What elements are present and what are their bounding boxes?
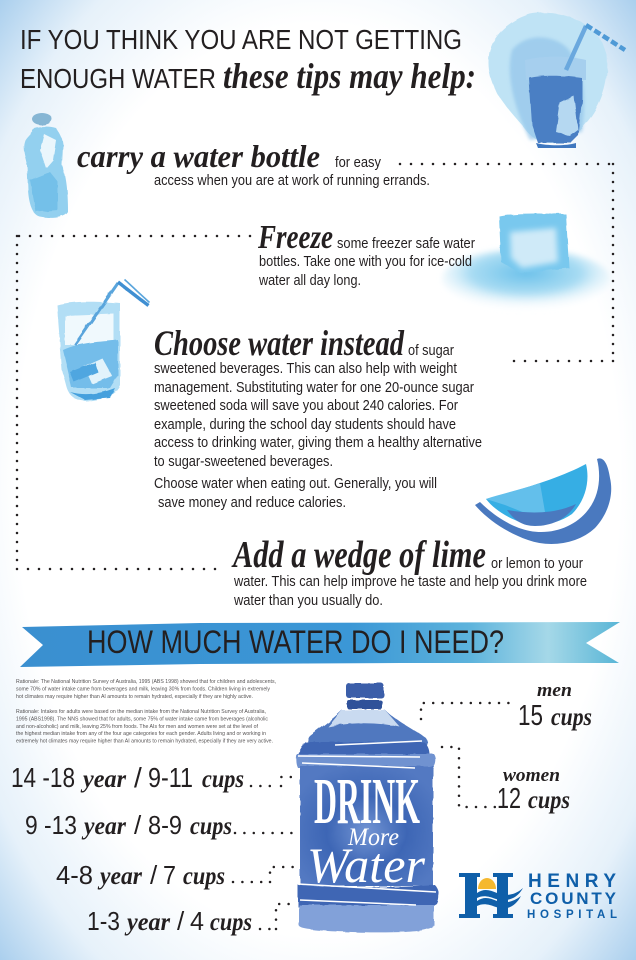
tip text: of sugar [408,342,454,359]
age row: 1-3: 4 [190,906,204,936]
age row: 9-13: 9 -13 [25,810,77,840]
tip text: access when you are at work of running errands. [154,173,430,189]
age row: 1-3: cups [210,909,252,936]
age row: 4-8: 4-8 [56,860,93,890]
age row: 9-13 [25,810,298,840]
tip text: example, during the school day students should have [154,416,456,433]
rationale text: and non-alcoholic) and milk, leaving 25% from foods. The AIs for men and women were set at the level of [16,724,258,730]
jug shape [296,683,439,932]
title: these tips may help: [223,56,476,96]
tip: carry a water bottle [24,113,430,218]
age row: 4-8: 7 [163,860,176,890]
tip text [258,235,475,289]
age row: 9-13: 8-9 [148,810,182,840]
women callout: 12 [497,783,521,815]
banner ribbon [20,622,620,667]
age row: 14-18: 14 -18 [11,762,75,793]
icon: glass with straw on watercolor blob [488,13,625,148]
age row: 4-8: year [97,863,142,890]
title: ENOUGH WATER [20,63,216,94]
logo name: COUNTY [530,889,617,908]
tip text: water than you usually do. [233,592,383,609]
tip text [154,155,430,189]
women callout [442,747,570,815]
men callout: cups [551,704,592,731]
logo name [527,871,617,921]
tip text: or lemon to your [491,555,583,572]
banner text: HOW MUCH WATER DO I NEED? [87,624,504,660]
age row: 1-3: / [177,906,185,936]
banner heading [20,622,620,667]
rationale text: 1995 (ABS1998). The NNS showed that for adults, some 75% of water intake came from beverages (alcoholic [16,716,268,722]
age row: 14-18: cups [202,766,244,793]
rationale text: the highest median intake from any of the four age categories for each gender. Adults living and or working in [16,731,266,737]
tip text: to sugar-sweetened beverages. [154,453,333,470]
men callout: men [537,680,572,701]
age row: 14-18: year [80,766,126,793]
tip heading: carry a water bottle [77,138,320,174]
tip text: water. This can help improve he taste and help you drink more [233,573,587,590]
title: IF YOU THINK YOU ARE NOT GETTING [20,24,462,55]
tip text: sweetened beverages. This can also help with weight [154,360,458,377]
title [20,24,476,96]
tip text [154,342,482,511]
jug highlight stripes [298,741,436,905]
water jug illustration [296,683,439,932]
tip text: for easy [335,155,382,171]
icon: lime wedge [475,458,611,544]
logo: Henry County Hospital [459,871,617,921]
tip heading: Add a wedge of lime [231,534,486,576]
age row: 9-13: / [134,810,142,840]
tip text: Choose water when eating out. Generally, you will [154,475,437,492]
rationale text: Rationale: The National Nutrition Survey of Australia, 1995 (ABS 1998) showed that for children and adolescents, [16,679,276,685]
tip text: save money and reduce calories. [158,494,346,511]
age row: 1-3 [87,904,295,936]
icon: glass with ice [57,279,150,401]
tip text: bottles. Take one with you for ice-cold [259,253,472,270]
tip: freeze [257,214,610,309]
age row: 14-18: 9-11 [148,762,193,793]
rationale text: extremely hot climates may require higher than AI amounts to remain hydrated, especially if they are very active. [16,738,273,744]
age row: 4-8: / [150,860,158,890]
women callout: women [503,765,560,786]
age row: 1-3: year [124,909,170,936]
men callout [421,680,592,732]
tip text: some freezer safe water [337,235,475,252]
water jug illustration: DRINK [314,765,420,838]
age row: 4-8 [56,860,297,890]
rationale text: Rationale: Intakes for adults were based on the median intake from the National Nutrition Survey of Australia, [16,709,266,715]
rationale text: hot climates may require higher than AI amounts to remain hydrated, especially if they are highly active. [16,694,253,700]
age row: 9-13: year [81,813,126,840]
rationale text [16,679,276,744]
age row: 4-8: cups [183,863,225,890]
age row: 14-18 [11,762,297,793]
tip: add a wedge of lime [231,458,611,609]
tip text: access to drinking water, giving them a healthy alternative [154,434,482,451]
tip heading: Choose water instead [154,323,405,363]
icon: ice cube and puddle [442,214,610,309]
age row: 14-18: / [134,762,142,793]
logo name: HENRY [528,871,616,892]
tip text [233,555,587,609]
jug text: more: More [347,824,399,851]
rationale text: some 70% of water intake came from beverages and milk, leaving 30% from foods. Children living in extremely [16,686,270,692]
tip: choose water instead [57,279,482,511]
logo mark [459,873,523,918]
age row: 1-3: 1-3 [87,906,120,936]
women callout: cups [528,787,570,814]
age row: 9-13: cups [190,813,232,840]
logo name: HOSPITAL [527,909,617,921]
jug text: water: Water [307,837,426,893]
tip text: water all day long. [258,272,361,289]
icon: water bottle [24,113,68,218]
tip heading: Freeze [257,219,333,256]
men callout: 15 [518,700,543,732]
tip text: management. Substituting water for one 20-ounce sugar [154,379,474,396]
tip text: sweetened soda will save you about 240 calories. For [154,397,458,414]
